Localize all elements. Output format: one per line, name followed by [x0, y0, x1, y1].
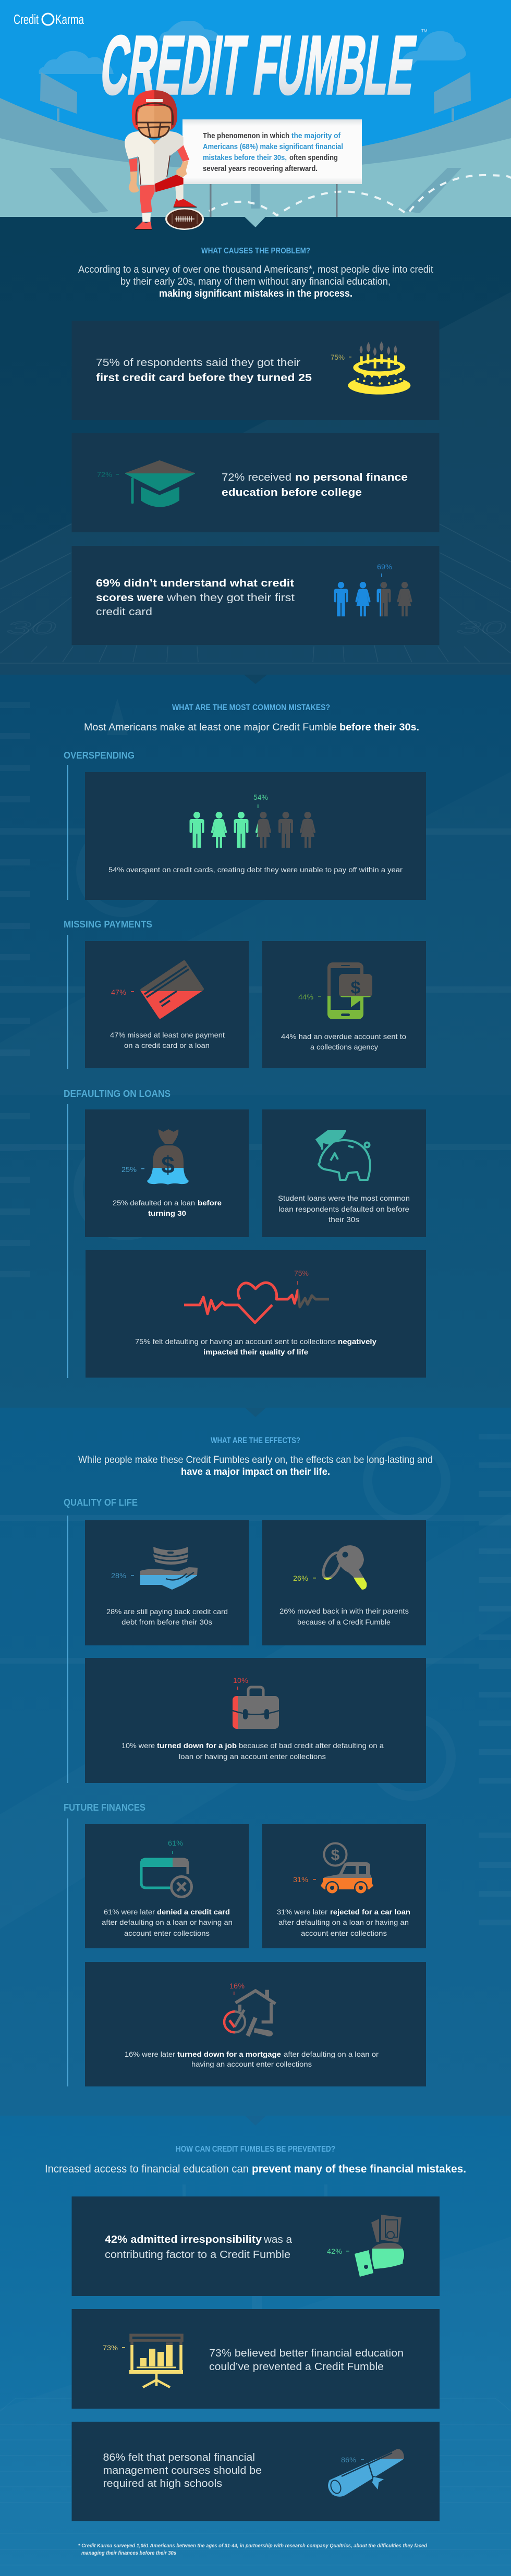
panel: denied a credit card: after defaulting on a loan or having an [102, 1918, 233, 1926]
footnote: * Credit Karma surveyed 1,051 Americans between the ages of 31-44, in partnership with research company Qualtrics, about the difficulties they faced [78, 2543, 428, 2549]
panel: first credit card before 25 [72, 321, 439, 420]
heading: quality of life: QUALITY OF LIFE [64, 1497, 138, 1508]
panel: did not understand credit scores: scores were [96, 592, 164, 604]
panel: did not understand credit scores: 69% [377, 563, 392, 571]
panel: defaulted on a loan: turning 30 [148, 1209, 186, 1217]
panel: quality of life impact [86, 1250, 426, 1377]
section 3 background [0, 1408, 511, 2116]
panel: denied a credit card: denied a credit card [157, 1908, 230, 1916]
panel: quality of life impact: 75% [294, 1269, 309, 1277]
footnote [78, 2543, 428, 2556]
section 1 background [0, 217, 511, 675]
panel: rejected for a car loan: after defaulting on a loan or having an [278, 1918, 409, 1926]
heading: defaulting on loans: DEFAULTING ON LOANS [64, 1089, 171, 1099]
section 2 heading: WHAT ARE THE MOST COMMON MISTAKES? [172, 703, 330, 712]
icon: four people 69 percent [334, 582, 412, 616]
football player [125, 90, 204, 230]
section 3 intro text [78, 1455, 433, 1478]
panel: student loans: their 30s [328, 1215, 359, 1224]
panel: defaulted on a loan: 25% [121, 1166, 137, 1174]
panel: collections agency [262, 941, 426, 1068]
icon: car and coin [321, 1844, 373, 1895]
section 1 intro text: According to a survey of over one thousand Americans*, most people dive into credit [78, 264, 434, 275]
heading: missing payments: MISSING PAYMENTS [64, 919, 152, 930]
panel: still paying debt [85, 1520, 249, 1645]
helmet and face [132, 90, 177, 138]
icon: phone and message: $ [351, 978, 361, 998]
icon: money bag [147, 1129, 189, 1185]
panel: quality of life impact: negatively [338, 1337, 376, 1346]
end zone markings [50, 168, 461, 213]
section 2 intro text: Most Americans make at least one major Credit Fumble [84, 722, 337, 733]
icon: piggy bank with grad cap [316, 1131, 370, 1180]
section 2 pointer triangle [244, 675, 267, 684]
panel: missed payment: on a credit card or a loan [124, 1041, 210, 1049]
icon: birthday cake [348, 341, 410, 395]
heading: future finances: FUTURE FINANCES [64, 1802, 145, 1813]
definition sign [182, 119, 362, 217]
panel: admitted irresponsibility [72, 2196, 440, 2296]
Credit Karma logo: Credit [14, 11, 39, 27]
section 3 pointer triangle [245, 1408, 266, 1417]
section 1 intro text: making significant mistakes in the process. [159, 288, 352, 299]
panel: defaulted on a loan: before [198, 1199, 222, 1207]
title: TM [421, 29, 428, 33]
panel: required at high schools: 86% [341, 2456, 356, 2464]
definition sign: several years recovering afterward. [203, 165, 318, 173]
section 4 background [0, 2116, 511, 2576]
panel: turned down for a job: loan or having an account enter collections [179, 1752, 326, 1761]
panel: no personal finance education: 72% [97, 471, 112, 479]
panel: collections agency: 44% [298, 993, 313, 1001]
section 2 intro text: before their 30s. [339, 722, 419, 733]
Credit Karma logo [14, 11, 84, 27]
panel: denied a credit card: 61% were later [104, 1908, 155, 1916]
icon: diploma scroll [328, 2449, 404, 2497]
panel: turned down for a mortgage: having an account enter collections [191, 2060, 312, 2068]
panel: required at high schools: required at high schools [103, 2478, 222, 2489]
panel: first credit card before 25: 75% of respondents said they got their [96, 357, 300, 369]
panel: admitted irresponsibility: contributing factor to a Credit Fumble [105, 2249, 290, 2261]
panel: first credit card before 25: 75% [331, 353, 345, 361]
panel: better financial education [72, 2309, 440, 2409]
panel: overspending: 54% [253, 793, 268, 801]
panel: turned down for a mortgage: 16% were later [125, 2050, 175, 2058]
section 3 heading: WHAT ARE THE EFFECTS? [211, 1436, 300, 1445]
panel: denied a credit card: account enter collections [124, 1929, 210, 1937]
section 1 background: 30 [6, 618, 56, 638]
panel: required at high schools: 86% felt that personal financial [103, 2452, 255, 2463]
panel: missed payment [85, 941, 249, 1068]
icon: house key [320, 1545, 367, 1590]
panel: turned down for a job: 10% [233, 1677, 248, 1684]
panel: no personal finance education [72, 433, 439, 532]
panel: better financial education: 73% [103, 2344, 118, 2352]
panel: admitted irresponsibility: 42% [327, 2248, 342, 2255]
section 4 heading: HOW CAN CREDIT FUMBLES BE PREVENTED? [176, 2145, 335, 2154]
panel: collections agency: a collections agency [310, 1043, 378, 1051]
definition sign: often spending [289, 154, 338, 162]
panel: required at high schools [72, 2422, 440, 2521]
Credit Karma logo: Karma [55, 11, 84, 27]
panel: turned down for a mortgage: turned down for a mortgage [177, 2050, 281, 2058]
panel: rejected for a car loan: 31% [293, 1876, 308, 1884]
panel: still paying debt: 28% [111, 1572, 126, 1580]
definition sign: Americans (68%) make significant financial [203, 143, 343, 151]
panel: turned down for a mortgage [85, 1962, 426, 2086]
panel: rejected for a car loan: account enter collections [301, 1929, 387, 1937]
panel: overspending: 54% overspent on credit cards, creating debt they were unable to pay off within a year [108, 865, 403, 874]
panel: turned down for a job: because of bad credit after defaulting on a [239, 1741, 384, 1750]
section 4 intro text: prevent many of these financial mistakes. [252, 2163, 466, 2175]
section 1 intro text: by their early 20s, many of them without any financial education, [120, 276, 391, 287]
panel: rejected for a car loan: rejected for a car loan [330, 1908, 410, 1916]
panel: overspending [85, 772, 426, 900]
section 3 intro text: While people make these Credit Fumbles early on, the effects can be long-lasting and [78, 1455, 433, 1466]
section 4 intro text [45, 2163, 466, 2175]
panel: student loans: loan respondents defaulted on before [278, 1205, 409, 1213]
icon: car and coin: $ [331, 1847, 340, 1864]
icon: fist with money [355, 2215, 404, 2277]
panel: quality of life impact: 75% felt defaulting or having an account sent to collections [135, 1337, 336, 1346]
panel: moved back with parents: 26% [293, 1574, 308, 1582]
section 1 background: 30 [456, 618, 506, 638]
panel: turned down for a mortgage: 16% [229, 1982, 245, 1990]
panel: admitted irresponsibility: 42% admitted irresponsibility [105, 2234, 262, 2245]
heading: overspending: OVERSPENDING [64, 750, 135, 761]
icon: hand with money [140, 1547, 198, 1590]
panel: did not understand credit scores: when they got their first [166, 592, 295, 604]
panel: defaulted on a loan: 25% defaulted on a loan [113, 1199, 195, 1207]
section 2 background [0, 675, 511, 1408]
panel: moved back with parents: 26% moved back in with their parents [279, 1607, 409, 1615]
panel: better financial education: could’ve prevented a Credit Fumble [209, 2361, 384, 2373]
panel: student loans [262, 1109, 426, 1237]
panel: moved back with parents: because of a Credit Fumble [297, 1618, 391, 1626]
panel: first credit card before 25: first credit card before they turned 25 [96, 372, 312, 384]
scoreboards [40, 72, 471, 121]
panel: denied a credit card [85, 1824, 249, 1948]
panel: admitted irresponsibility: was a [263, 2234, 293, 2245]
section 1 intro text [78, 264, 434, 299]
panel: collections agency: 44% had an overdue account sent to [281, 1032, 406, 1041]
hero: sky background [0, 0, 511, 217]
icon: denied card [141, 1859, 192, 1897]
ball bounce dashed path [209, 175, 511, 215]
panel: no personal finance education: no personal finance [295, 472, 408, 483]
panel: turned down for a job [85, 1658, 426, 1783]
panel: turned down for a mortgage: after defaulting on a loan or [284, 2050, 379, 2058]
panel: required at high schools: management courses should be [103, 2465, 262, 2476]
panel: missed payment: 47% missed at least one payment [110, 1031, 225, 1039]
icon: house, check and stamp [224, 1990, 275, 2036]
icon: money bag: $ [161, 1151, 175, 1178]
panel: still paying debt: debt from before their 30s [121, 1618, 212, 1626]
panel: quality of life impact: impacted their quality of life [203, 1348, 308, 1356]
football [165, 208, 204, 230]
icon: heartbeat line [184, 1283, 329, 1323]
section 3 intro text: have a major impact on their life. [181, 1467, 330, 1478]
field lawn [0, 138, 511, 217]
section 1 heading: WHAT CAUSES THE PROBLEM? [201, 247, 310, 255]
icon: six people 54 percent [190, 812, 315, 848]
hero pointer triangle [245, 217, 265, 227]
panel: better financial education: 73% believed better financial education [209, 2348, 404, 2359]
footnote: managing their finances before their 30s [81, 2550, 176, 2556]
panel: did not understand credit scores: 69% didn’t understand what credit [96, 578, 294, 589]
panel: moved back with parents [262, 1520, 426, 1645]
panel: turned down for a job: turned down for a job [157, 1741, 237, 1750]
stadium stands [0, 98, 511, 217]
section 4 intro text: Increased access to financial education can [45, 2163, 249, 2175]
panel: still paying debt: 28% are still paying back credit card [106, 1607, 228, 1616]
panel: turned down for a job: 10% were [121, 1741, 155, 1750]
definition sign: mistakes before their 30s, [203, 154, 287, 162]
icon: presentation chart [129, 2335, 183, 2387]
panel: did not understand credit scores [72, 546, 439, 645]
panel: student loans: Student loans were the most common [278, 1194, 410, 1202]
panel: rejected for a car loan [262, 1824, 426, 1948]
clouds [39, 21, 466, 74]
panel: did not understand credit scores: credit card [96, 606, 152, 618]
section 4 pointer triangle [245, 2116, 266, 2126]
panel: no personal finance education: education before college [222, 487, 362, 498]
icon: briefcase [233, 1687, 279, 1729]
panel: no personal finance education: 72% received [222, 472, 291, 483]
icon: graduation cap [126, 461, 194, 507]
icon: phone and message [327, 962, 372, 1019]
definition sign: the majority of [291, 132, 340, 140]
panel: missed payment: 47% [111, 988, 126, 996]
definition sign: The phenomenon in which [203, 132, 289, 140]
panel: rejected for a car loan: 31% were later [277, 1908, 327, 1916]
icon: credit card [142, 962, 202, 1017]
panel: denied a credit card: 61% [168, 1839, 183, 1847]
panel: defaulted on a loan [85, 1109, 249, 1237]
